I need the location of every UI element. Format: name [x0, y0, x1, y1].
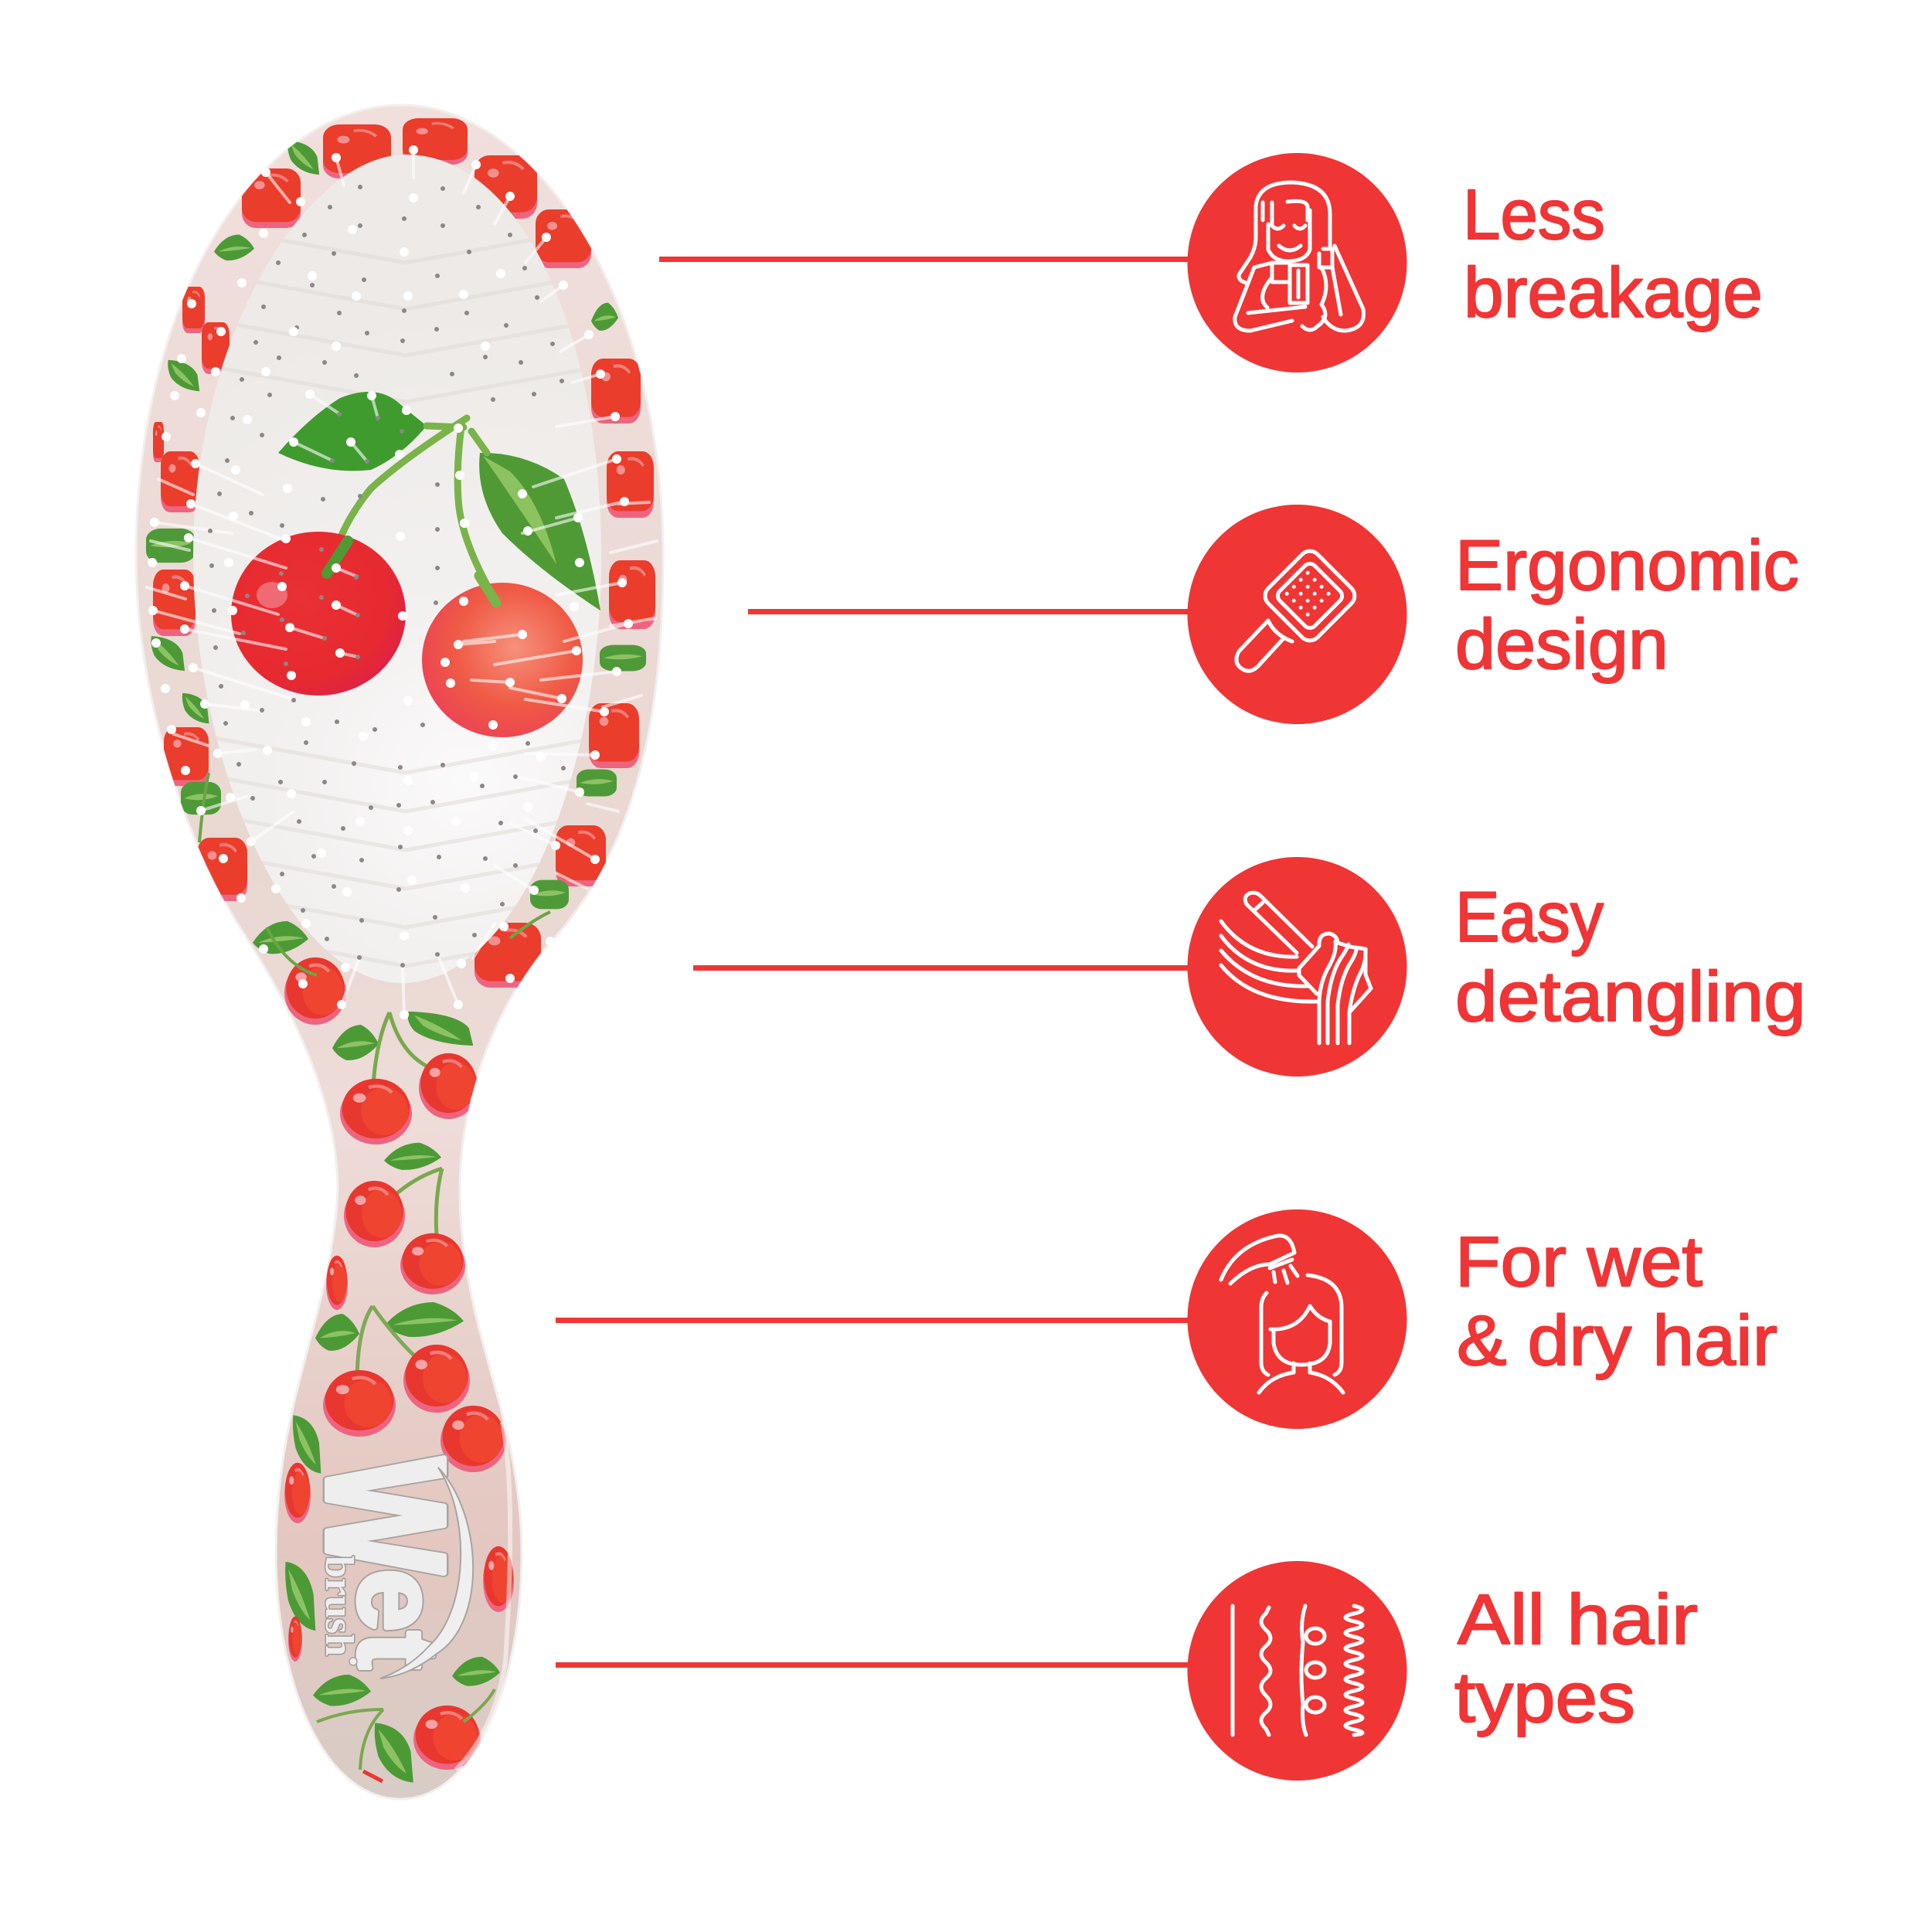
label: [1463, 175, 1763, 332]
right cherry: [422, 583, 583, 737]
rim cherry pattern: [146, 118, 655, 1025]
large cherries artwork: [231, 392, 600, 737]
icon: paddle brush: [1236, 546, 1359, 671]
connector line: [748, 609, 1192, 614]
label: Less: [1463, 175, 1605, 254]
label: [1455, 526, 1799, 684]
callout 1: less breakage: [659, 153, 1763, 372]
icon: hair types: [1233, 1606, 1362, 1735]
bristle bases: [210, 187, 563, 965]
icon: detangling hair: [1221, 893, 1371, 1043]
bristle shafts: [147, 150, 657, 1015]
connector line: [693, 965, 1192, 971]
label: For wet: [1455, 1223, 1702, 1301]
icon circle: [1187, 153, 1406, 372]
logo word Wet: et: [335, 1569, 461, 1669]
label: [1455, 878, 1806, 1036]
logo: Wet brush: [291, 1458, 479, 1679]
icon circle: [1187, 1209, 1406, 1429]
logo word Wet: [291, 1458, 479, 1669]
icon: woman brushing hair: [1235, 182, 1364, 331]
brush body: [136, 105, 663, 1799]
logo word Wet: W: [291, 1458, 479, 1573]
callout 3: easy detangling: [693, 857, 1806, 1077]
label: & dry hair: [1457, 1301, 1777, 1380]
label: Ergonomic: [1455, 526, 1799, 605]
bristle tips: [152, 150, 628, 1015]
icon circle: [1187, 857, 1406, 1077]
label: design: [1455, 605, 1668, 684]
label: All hair: [1458, 1580, 1698, 1659]
connector line: [556, 1318, 1192, 1323]
callout 5: all hair types: [556, 1561, 1698, 1781]
stems: [328, 418, 497, 603]
logo swoosh: [380, 1468, 473, 1679]
pad ripples: [216, 239, 581, 968]
connector line: [659, 257, 1192, 262]
callout 4: for wet and dry hair: [556, 1209, 1777, 1429]
label: types: [1454, 1658, 1635, 1737]
logo word Wet: W: [291, 1458, 479, 1573]
label: detangling: [1455, 957, 1806, 1036]
panel: hairbrush product: [136, 105, 663, 1799]
label: [1455, 1223, 1777, 1380]
logo word brush: brush: [317, 1556, 361, 1656]
label: [1454, 1580, 1698, 1737]
logo word Wet: et: [335, 1569, 461, 1669]
bristle pad: [193, 155, 601, 983]
icon circle: [1187, 505, 1406, 724]
callout 2: ergonomic design: [748, 505, 1799, 724]
icon: shower over head: [1221, 1236, 1343, 1393]
left leaf: [278, 392, 427, 471]
label: Easy: [1455, 878, 1604, 957]
label: breakage: [1464, 253, 1763, 332]
right leaf: [479, 453, 600, 611]
handle gloss: [456, 1097, 510, 1770]
left cherry: [231, 532, 406, 696]
icon circle: [1187, 1561, 1406, 1781]
handle cherry pattern: [284, 1012, 514, 1783]
connector line: [556, 1662, 1192, 1668]
